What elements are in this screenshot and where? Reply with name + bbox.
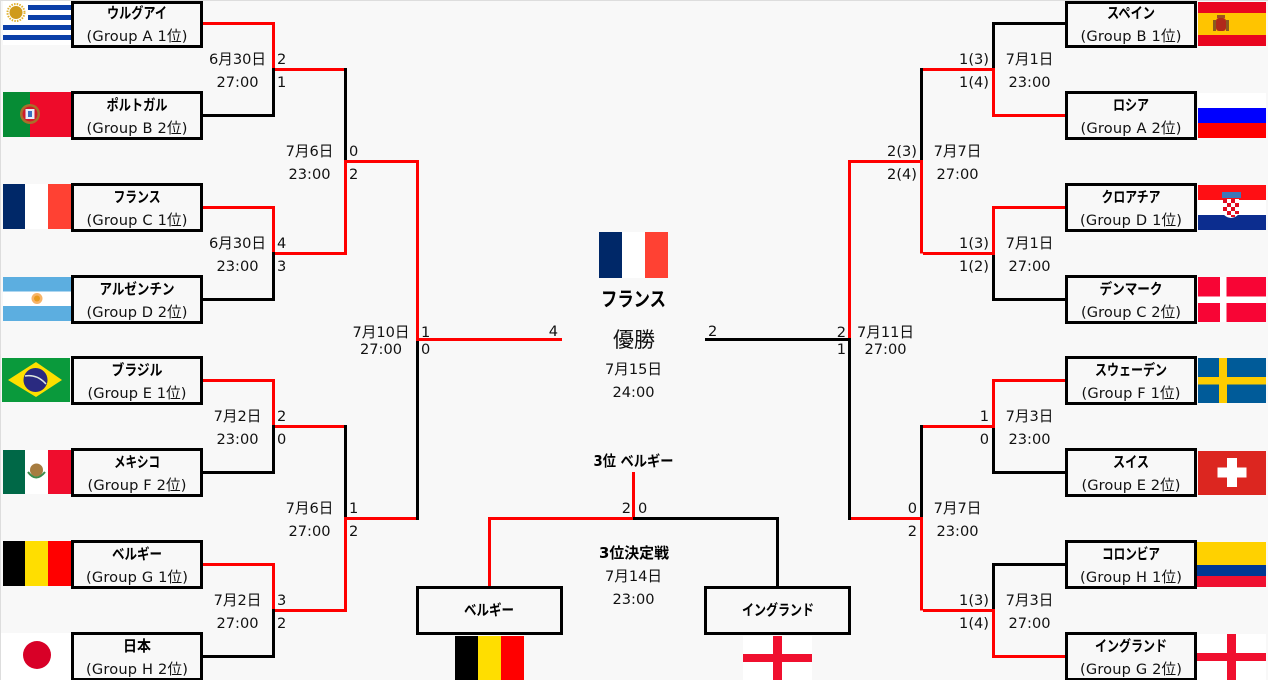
match: Colombia v England [923,564,1065,656]
match: Uruguay v Portugal: 6月30日 [209,51,266,68]
match: Croatia v Denmark: 1(2) [959,258,989,275]
match: Brazil v Mexico [203,380,344,472]
icon: flag of Brazil [2,358,70,402]
icon: flag of Colombia [1197,542,1266,587]
match: Sweden v Switzerland [923,380,1065,472]
match: Uruguay v Portugal: 1 [277,74,286,91]
third-place result [594,452,674,518]
team box: Colombia: (Group H 1位) [1080,569,1182,586]
team box: Denmark [1066,276,1196,322]
match: Brazil v Mexico: 2 [277,408,286,425]
match: Brazil v Mexico: 23:00 [216,431,259,448]
team box: Colombia: コロンビア [1102,545,1160,563]
match: Uruguay v Portugal [203,24,344,116]
team box: Russia [1066,92,1196,138]
icon: flag of Croatia [1198,185,1266,230]
match: quarter-final England v Sweden: 2 [908,523,917,540]
match: Brazil v Mexico: 7月2日 [214,408,261,425]
team box: Croatia [1066,184,1196,230]
team box: France: (Group C 1位) [86,212,188,229]
team box: Japan: (Group H 2位) [86,661,188,678]
team box: Denmark: (Group C 2位) [1081,304,1181,321]
match: semi-final France v Belgium: 7月10日 [352,324,410,341]
team box: Portugal: ポルトガル [106,96,168,114]
match: Croatia v Denmark [923,208,1065,300]
third-place result: 3位 ベルギー [594,452,674,470]
match: Spain v Russia: 1(4) [959,74,989,91]
team box: Switzerland: スイス [1113,453,1149,471]
team box: Spain: (Group B 1位) [1080,28,1182,45]
champion panel [599,232,668,401]
match: quarter-final France v Uruguay: 23:00 [288,166,331,183]
icon: flag of England [1197,634,1266,680]
team box: Portugal [72,92,202,138]
match: France v Argentina [203,208,347,300]
icon: flag of Russia [1198,93,1266,138]
third-place team: England: イングランド [742,601,814,619]
icon: flag of Spain [1198,2,1266,46]
team box: Portugal: (Group B 2位) [86,120,188,137]
team box: Brazil: (Group E 1位) [88,385,186,402]
team box: Belgium: (Group G 1位) [86,569,188,586]
third-place match bracket [490,500,778,586]
third-place team: Belgium [418,588,562,680]
match: Brazil v Mexico: 0 [277,431,286,448]
match: quarter-final Croatia v Russia: 2(4) [887,166,917,183]
team box: England [1066,634,1196,680]
match: Belgium v Japan: 3 [277,592,286,609]
match: Spain v Russia: 7月1日 [1006,51,1053,68]
final scores: 2 [708,323,717,340]
icon: flag of Portugal [3,92,71,137]
match: Sweden v Switzerland: 0 [980,431,989,448]
team box: Croatia: (Group D 1位) [1080,212,1182,229]
match: France v Argentina: 3 [277,258,286,275]
match: semi-final Croatia v England: 27:00 [864,341,907,358]
team box: Belgium [72,542,202,588]
match: semi-final Croatia v England: 2 [837,324,846,341]
third-place match details: 23:00 [612,591,655,608]
team box: France [72,184,202,230]
team box: Croatia: クロアチア [1102,188,1160,206]
champion panel: 24:00 [612,384,655,401]
match: quarter-final Croatia v Russia [850,68,981,339]
team box: Sweden: (Group F 1位) [1082,385,1180,402]
team box: Russia: ロシア [1113,96,1149,114]
icon: flag of Belgium [3,541,71,586]
team box: Brazil [72,358,202,404]
match: Uruguay v Portugal: 27:00 [216,74,259,91]
match: semi-final France v Belgium: 1 [421,324,430,341]
team box: Argentina: (Group D 2位) [86,304,188,321]
third-place match details: 3位決定戦 [599,544,669,562]
match: Belgium v Japan [203,564,347,656]
third-place team: England [706,588,850,680]
match: quarter-final France v Uruguay: 7月6日 [286,143,333,160]
icon: flag of Uruguay [3,1,71,45]
champion panel: フランス [601,287,666,311]
match: Sweden v Switzerland: 23:00 [1008,431,1051,448]
team box: Switzerland: (Group E 2位) [1082,477,1180,494]
final scores: 4 [549,323,558,340]
team box: Denmark: デンマーク [1100,280,1162,298]
third-place match details: 7月14日 [605,568,662,585]
icon: flag of Switzerland [1198,451,1266,495]
team box: France: フランス [114,188,160,206]
match: quarter-final Croatia v Russia: 7月7日 [934,143,981,160]
icon: flag of Argentina [3,277,71,321]
team box: Switzerland [1066,450,1196,496]
match: France v Argentina: 23:00 [216,258,259,275]
match: quarter-final France v Uruguay: 0 [349,143,358,160]
match: semi-final Croatia v England: 7月11日 [857,324,914,341]
match: Colombia v England: 27:00 [1008,615,1051,632]
third-place match bracket: 0 [638,500,647,517]
team box: Mexico: メキシコ [114,453,160,471]
match: quarter-final France v Uruguay: 2 [349,166,358,183]
match: Belgium v Japan: 27:00 [216,615,259,632]
match: quarter-final Belgium v Brazil: 27:00 [288,523,331,540]
match: Colombia v England: 1(3) [959,592,989,609]
match: quarter-final Croatia v Russia: 2(3) [887,143,917,160]
team box: Mexico: (Group F 2位) [88,477,186,494]
team box: Spain [1066,2,1196,46]
team box: England: (Group G 2位) [1080,661,1182,678]
third-place match details [599,544,669,608]
team box: Japan [72,634,202,680]
match: quarter-final Belgium v Brazil: 7月6日 [286,500,333,517]
match: quarter-final Belgium v Brazil [286,425,416,610]
team box: Japan: 日本 [123,637,151,655]
team box: Argentina: アルゼンチン [100,280,174,298]
match: Colombia v England: 1(4) [959,615,989,632]
match: Uruguay v Portugal: 2 [277,51,286,68]
match: semi-final France v Belgium: 27:00 [360,341,402,358]
match: Croatia v Denmark: 7月1日 [1006,235,1053,252]
match: semi-final France v Belgium: 0 [421,341,430,358]
team box: Sweden [1066,358,1196,404]
match: quarter-final France v Uruguay [286,68,418,339]
icon: flag of Mexico [3,450,71,494]
match: quarter-final England v Sweden [851,425,981,610]
match: France v Argentina: 4 [277,235,286,252]
team box: Uruguay: ウルグアイ [107,4,167,22]
match: quarter-final Belgium v Brazil: 2 [349,523,358,540]
icon: flag of Denmark [1198,277,1266,322]
match: quarter-final England v Sweden: 0 [908,500,917,517]
match: France v Argentina: 6月30日 [209,235,266,252]
icon: flag of Japan [1,633,71,680]
match: Croatia v Denmark: 1(3) [959,235,989,252]
match: semi-final Croatia v England: 1 [837,341,846,358]
champion panel: 7月15日 [605,361,662,378]
team box: Spain: スペイン [1107,4,1155,22]
team box: Uruguay: (Group A 1位) [86,28,188,45]
team box: Russia: (Group A 2位) [1080,120,1182,137]
match: Spain v Russia [923,24,1065,116]
third-place match bracket: 2 [622,500,631,517]
team box: Brazil: ブラジル [112,361,162,379]
match: Spain v Russia: 23:00 [1008,74,1051,91]
team box: Mexico [72,450,202,496]
match: quarter-final England v Sweden: 23:00 [936,523,979,540]
match: semi-final Croatia v England [705,324,914,520]
match: Sweden v Switzerland: 7月3日 [1006,408,1053,425]
match: Belgium v Japan: 2 [277,615,286,632]
team box: Sweden: スウェーデン [1095,361,1167,379]
match: Colombia v England: 7月3日 [1006,592,1053,609]
match: quarter-final England v Sweden: 7月7日 [934,500,981,517]
third-place team: Belgium: ベルギー [464,601,514,619]
icon: flag of Sweden [1198,358,1266,403]
match: Croatia v Denmark: 27:00 [1008,258,1051,275]
match: semi-final France v Belgium [352,324,562,520]
match: Sweden v Switzerland: 1 [980,408,989,425]
team box: Uruguay [72,2,202,46]
final scores [549,323,717,340]
match: quarter-final Croatia v Russia: 27:00 [936,166,979,183]
match: quarter-final Belgium v Brazil: 1 [349,500,358,517]
team box: Colombia [1066,542,1196,588]
champion panel: 優勝 [613,328,655,352]
match: Belgium v Japan: 7月2日 [214,592,261,609]
match: Spain v Russia: 1(3) [959,51,989,68]
icon: flag of France [3,184,71,229]
team box: England: イングランド [1095,637,1167,655]
team box: Argentina [72,276,202,322]
team box: Belgium: ベルギー [112,545,162,563]
